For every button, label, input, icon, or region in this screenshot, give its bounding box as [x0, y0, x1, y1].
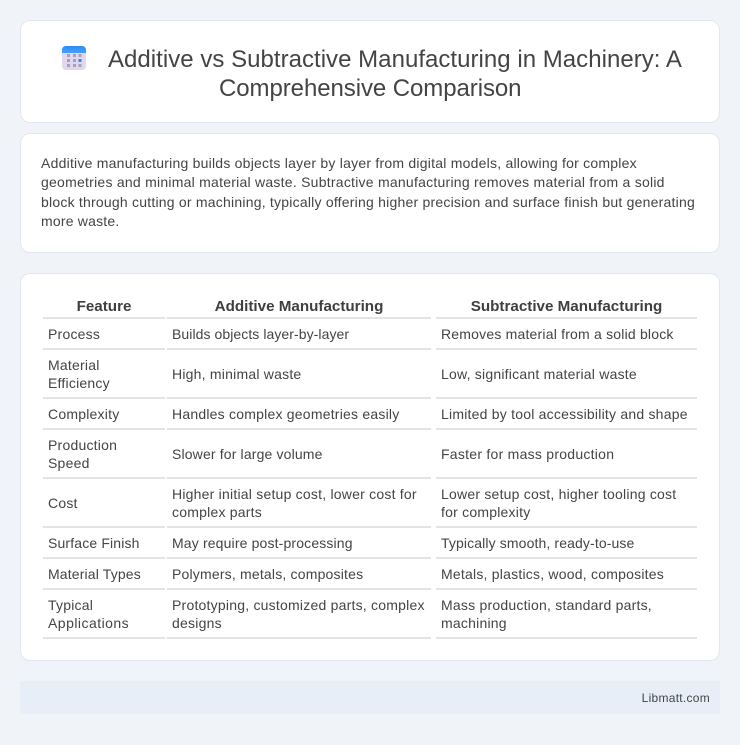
title: Comprehensive Comparison [219, 75, 521, 102]
row: complexity: Limited by tool accessibility and shape [441, 406, 688, 422]
intro text: Additive manufacturing builds objects layer by layer from digital models, allowing for complex [41, 154, 637, 170]
row: surface finish: May require post-processing [172, 535, 353, 551]
row: typical applications [48, 597, 652, 631]
row: cost: Higher initial setup cost, lower cost for [172, 486, 417, 502]
panel: introduction [20, 133, 720, 253]
row: production speed: Slower for large volume [172, 446, 323, 462]
row: cost [48, 486, 676, 520]
footer bar [20, 681, 720, 714]
title: Additive vs Subtractive Manufacturing in Machinery: A [108, 46, 682, 73]
row: material types: Material Types [48, 566, 141, 582]
row: typical applications: Prototyping, customized parts, complex [172, 597, 425, 613]
row: typical applications: machining [441, 615, 507, 631]
intro text [41, 154, 695, 229]
row: typical applications: Mass production, standard parts, [441, 597, 652, 613]
row: material efficiency [48, 357, 637, 391]
table header: Feature [77, 298, 131, 315]
row: cost: Lower setup cost, higher tooling cost [441, 486, 676, 502]
row: material efficiency: Low, significant material waste [441, 366, 637, 382]
row: complexity: Complexity [48, 406, 119, 422]
row: process: Process [48, 326, 100, 342]
row: process: Removes material from a solid block [441, 326, 674, 342]
row: material types: Polymers, metals, composites [172, 566, 363, 582]
table header: Additive Manufacturing [215, 298, 383, 315]
row: production speed: Speed [48, 455, 90, 471]
icon: calendar [62, 46, 86, 70]
row: complexity: Handles complex geometries easily [172, 406, 399, 422]
row: surface finish: Surface Finish [48, 535, 140, 551]
row: complexity [48, 406, 688, 422]
comparison table [43, 298, 697, 639]
panel: title card [20, 20, 720, 123]
row: material efficiency: High, minimal waste [172, 366, 301, 382]
row: surface finish: Typically smooth, ready-to-use [441, 535, 634, 551]
row: material efficiency: Material [48, 357, 100, 373]
row: cost: complex parts [172, 504, 262, 520]
row: production speed: Faster for mass production [441, 446, 614, 462]
table header: Subtractive Manufacturing [471, 298, 662, 315]
intro text: block through cutting or machining, typically offering higher precision and surface finish but generating [41, 194, 695, 210]
row: process: Builds objects layer-by-layer [172, 326, 349, 342]
table header [77, 298, 662, 315]
row: typical applications: Typical [48, 597, 93, 613]
row: material efficiency: Efficiency [48, 375, 110, 391]
panel: comparison table [20, 273, 720, 661]
row: surface finish [48, 535, 634, 551]
row: typical applications: designs [172, 615, 222, 631]
footer text: Libmatt.com [642, 691, 710, 705]
row: process [48, 326, 674, 342]
intro text: more waste. [41, 213, 119, 229]
row: typical applications: Applications [48, 615, 129, 631]
row: production speed: Production [48, 437, 117, 453]
title [108, 46, 682, 102]
intro text: geometries and minimal material waste. Subtractive manufacturing removes material from a solid [41, 174, 665, 190]
row: material types [48, 566, 664, 582]
row: material types: Metals, plastics, wood, composites [441, 566, 664, 582]
row: production speed [48, 437, 614, 471]
row: cost: Cost [48, 495, 78, 511]
row: cost: for complexity [441, 504, 530, 520]
